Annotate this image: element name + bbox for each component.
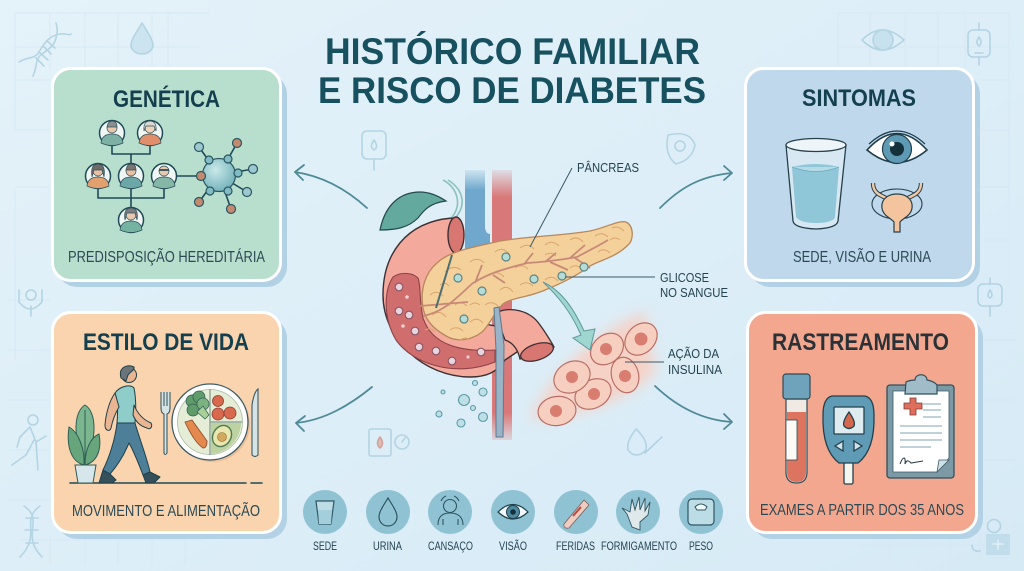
glucose bubbles (436, 380, 488, 427)
panel: estilo de vida (52, 312, 287, 539)
background icon: meter and gauge (369, 429, 409, 456)
pancreas outflow tube (495, 310, 556, 365)
background icon: DNA top left (19, 23, 71, 76)
icon: clipboard (887, 375, 954, 478)
arrow: to rastreamento (655, 386, 732, 429)
caption: sintomas: SEDE, VISÃO E URINA (793, 246, 931, 266)
heading: sintomas: SINTOMAS (802, 85, 916, 112)
walking person (99, 366, 160, 483)
title: HISTÓRICO FAMILIAR (325, 30, 700, 72)
fork (161, 392, 170, 454)
family tree (86, 120, 201, 232)
blood vessels (465, 170, 512, 440)
label: ação da insulina (625, 347, 723, 377)
molecule (194, 138, 258, 214)
insulin arrow (543, 282, 595, 350)
label: pâncreas: PÂNCREAS (577, 160, 639, 175)
background icon: bladder small centre (362, 131, 386, 170)
panel: rastreamento (748, 312, 983, 539)
caption: rastreamento: EXAMES A PARTIR DOS 35 ANOS (760, 502, 964, 519)
background icon: DNA bottom left (20, 506, 42, 557)
symptom row (303, 490, 723, 553)
knife (252, 389, 258, 456)
symptom: urina (366, 490, 410, 553)
label: pâncreas (530, 160, 639, 247)
symptom: formigamento (601, 490, 677, 553)
symptom: visão (491, 490, 535, 553)
icon: eye (867, 131, 927, 164)
plate with food (172, 384, 250, 462)
arrow: to genética (295, 165, 367, 208)
label: ação da insulina: AÇÃO DA (668, 347, 720, 361)
symptom: visão: VISÃO (499, 540, 527, 553)
panel: genética (52, 68, 287, 287)
icon: blood tube (783, 374, 810, 483)
symptom: urina: URINA (373, 541, 402, 553)
label: glicose no sangue: NO SANGUE (660, 286, 728, 300)
duodenum (383, 217, 520, 377)
stem and leaf (380, 180, 462, 230)
background icon: glucose bag top right (968, 23, 990, 65)
caption: genética: PREDISPOSIÇÃO HEREDITÁRIA (68, 246, 265, 266)
heading: rastreamento: RASTREAMENTO (772, 329, 949, 356)
symptom: formigamento: FORMIGAMENTO (601, 541, 677, 553)
glucose dots (454, 253, 588, 323)
symptom: feridas (554, 490, 598, 553)
plant (68, 405, 100, 483)
ground line (70, 482, 262, 484)
label: ação da insulina: INSULINA (668, 363, 723, 377)
icon: bladder (872, 183, 922, 232)
background icon: person (972, 520, 1010, 555)
background icon: drop (131, 23, 153, 54)
symptom: peso: PESO (689, 541, 713, 553)
grey vein (436, 255, 452, 308)
panel: sintomas (746, 68, 980, 287)
title: E RISCO DE DIABETES (318, 70, 706, 111)
symptom: cansaço: CANSAÇO (428, 541, 473, 553)
background icon: kidney centre right (667, 134, 695, 164)
pancreas (420, 222, 632, 340)
central pancreas illustration (380, 170, 664, 440)
heading: estilo de vida: ESTILO DE VIDA (83, 329, 249, 356)
lower vein (494, 307, 504, 437)
label: glicose no sangue: GLICOSE (660, 271, 709, 285)
cells: insulin action (530, 312, 664, 428)
symptom: peso (679, 490, 723, 553)
arrow: to estilo de vida (296, 387, 372, 431)
label: glicose no sangue (565, 271, 728, 300)
icon: glucose meter (823, 396, 874, 484)
symptom: sede: SEDE (313, 541, 337, 553)
background icon: eye (862, 30, 904, 50)
icon: glass of water (786, 138, 846, 229)
arrow: to sintomas (660, 166, 732, 208)
pancreatic duct (420, 240, 608, 316)
background icon: drop and thermometer (628, 429, 662, 455)
background icon: runner (12, 415, 46, 470)
symptom: sede (303, 490, 347, 553)
symptom: feridas: FERIDAS (556, 541, 595, 553)
background icon: small bladder left (19, 290, 42, 316)
background icon: glucose bag right (978, 278, 1002, 316)
title (318, 30, 706, 111)
symptom: cansaço (428, 490, 473, 553)
caption: estilo de vida: MOVIMENTO E ALIMENTAÇÃO (72, 500, 260, 520)
heading: genética: GENÉTICA (113, 85, 220, 113)
